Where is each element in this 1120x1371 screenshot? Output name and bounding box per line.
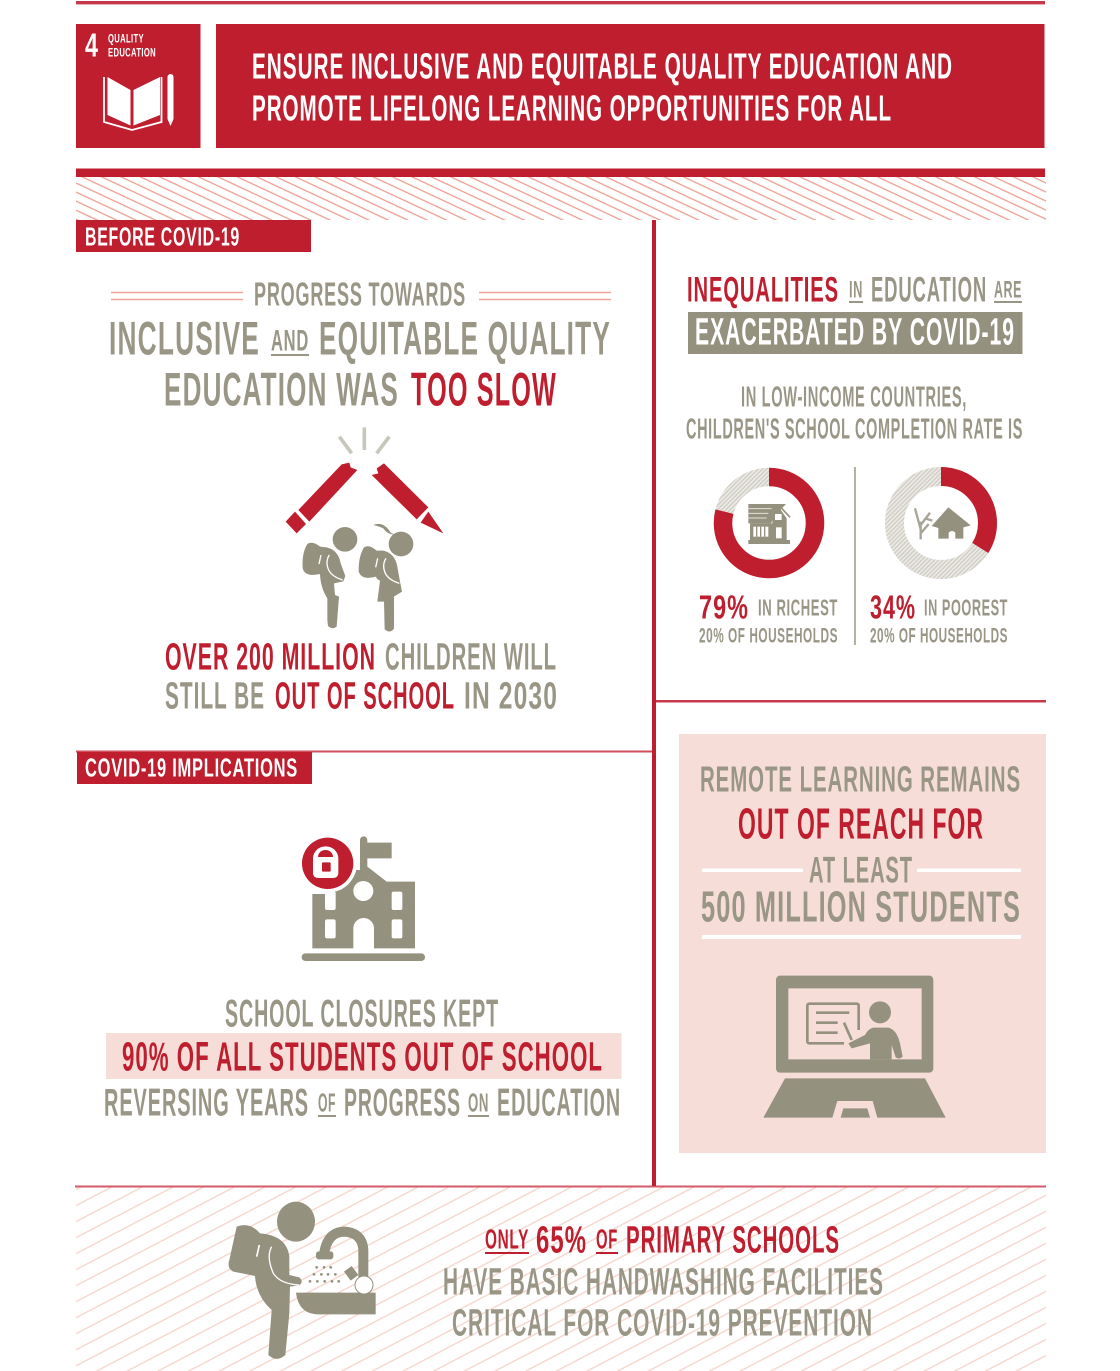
donut: richest households <box>723 477 815 569</box>
panel heading: AT LEAST <box>809 849 913 890</box>
icon: child washing hands <box>229 1202 376 1359</box>
progress towards label: PROGRESS TOWARDS <box>254 275 466 312</box>
stat: 200 million out of school: IN 2030 <box>464 675 558 717</box>
panel: remote learning <box>679 734 1046 1153</box>
red padlock badge <box>298 834 357 893</box>
stat: 34 percent poorest: 20% OF HOUSEHOLDS <box>870 624 1008 647</box>
sink and soap <box>296 1232 376 1314</box>
vertical divider <box>652 220 656 1186</box>
stat: 34 percent poorest <box>870 588 1008 647</box>
reversing progress line: PROGRESS <box>344 1081 461 1124</box>
line one: PRIMARY SCHOOLS <box>626 1219 840 1261</box>
section tag: before covid: BEFORE COVID-19 <box>85 221 240 251</box>
heading line two: TOO SLOW <box>411 362 557 415</box>
stat: 200 million out of school: OUT OF SCHOOL <box>275 675 455 717</box>
icon: closed school <box>298 834 425 961</box>
stat: 200 million out of school: OVER 200 MILLION <box>165 636 376 678</box>
stat: 79 percent richest: IN RICHEST <box>758 594 838 620</box>
top hatch band <box>76 177 1046 220</box>
heading line one: INCLUSIVE <box>109 311 260 364</box>
icon: house <box>748 504 790 544</box>
stat: 34 percent poorest: IN POOREST <box>924 594 1008 620</box>
heading: inequalities: IN <box>849 276 863 303</box>
icon: online teacher laptop <box>763 976 946 1118</box>
donut: poorest households <box>894 476 988 570</box>
stat: 200 million out of school <box>165 636 558 717</box>
icon: broken pencil and children <box>286 427 443 631</box>
progress towards label <box>111 275 611 312</box>
text: completion rate intro <box>686 381 1023 445</box>
heading: inequalities: ARE <box>994 276 1022 303</box>
heading: progress too slow <box>109 275 611 415</box>
title banner <box>216 24 1044 148</box>
reversing progress line: EDUCATION <box>497 1081 621 1124</box>
line one: ONLY <box>485 1223 529 1254</box>
stat: school closures <box>104 992 622 1124</box>
top rule <box>76 1 1045 4</box>
reversing progress line: REVERSING YEARS <box>104 1081 309 1124</box>
reversing progress line: ON <box>468 1087 489 1117</box>
icon: hut and tree <box>915 507 971 539</box>
section tag: covid implications: COVID-19 IMPLICATIONS <box>85 752 298 782</box>
left horizontal divider <box>76 750 652 752</box>
panel heading <box>700 758 1021 939</box>
divider between donuts <box>854 467 856 645</box>
reversing progress line: OF <box>318 1087 336 1117</box>
heading line two: EDUCATION WAS <box>164 362 399 415</box>
badge number: 4 <box>85 26 99 63</box>
badge label: EDUCATION <box>108 45 156 59</box>
icon: book and pencil <box>104 74 174 130</box>
right horizontal divider <box>656 700 1046 702</box>
section tag: covid implications <box>77 752 312 784</box>
stat: handwashing facilities <box>443 1219 884 1344</box>
highlight box <box>106 1033 622 1079</box>
heading: inequalities: EDUCATION <box>871 270 987 309</box>
stat: 34 percent poorest: 34% <box>870 588 916 625</box>
bottom band rule <box>75 1186 1046 1188</box>
heading line one: AND <box>271 324 309 357</box>
stat: 79 percent richest <box>699 588 838 647</box>
SDG 4 badge <box>76 24 200 148</box>
stat: school closures: SCHOOL CLOSURES KEPT <box>225 992 499 1035</box>
girl with backpack <box>359 524 413 631</box>
heading: inequalities <box>687 270 1022 354</box>
stat: 79 percent richest: 20% OF HOUSEHOLDS <box>699 624 838 647</box>
line one <box>485 1219 840 1261</box>
heading line one: EQUITABLE QUALITY <box>319 311 611 364</box>
badge label: QUALITY <box>108 31 144 45</box>
stat: 200 million out of school: CHILDREN WILL <box>385 636 557 678</box>
broken pencil <box>286 463 443 533</box>
child with backpack <box>303 527 357 628</box>
heading line one <box>109 311 611 364</box>
stat: 79 percent richest: 79% <box>699 588 749 625</box>
child <box>229 1202 315 1359</box>
spark lines <box>339 427 389 453</box>
bottom hatch band <box>76 1187 1046 1371</box>
school building <box>302 836 425 961</box>
highlight box: 90% OF ALL STUDENTS OUT OF SCHOOL <box>122 1033 603 1079</box>
heading: inequalities: INEQUALITIES <box>687 270 839 309</box>
stat: 200 million out of school: STILL BE <box>165 675 265 717</box>
header rule <box>76 168 1045 177</box>
badge label <box>108 31 156 59</box>
line one: OF <box>596 1223 618 1254</box>
line one: 65% <box>536 1219 587 1261</box>
